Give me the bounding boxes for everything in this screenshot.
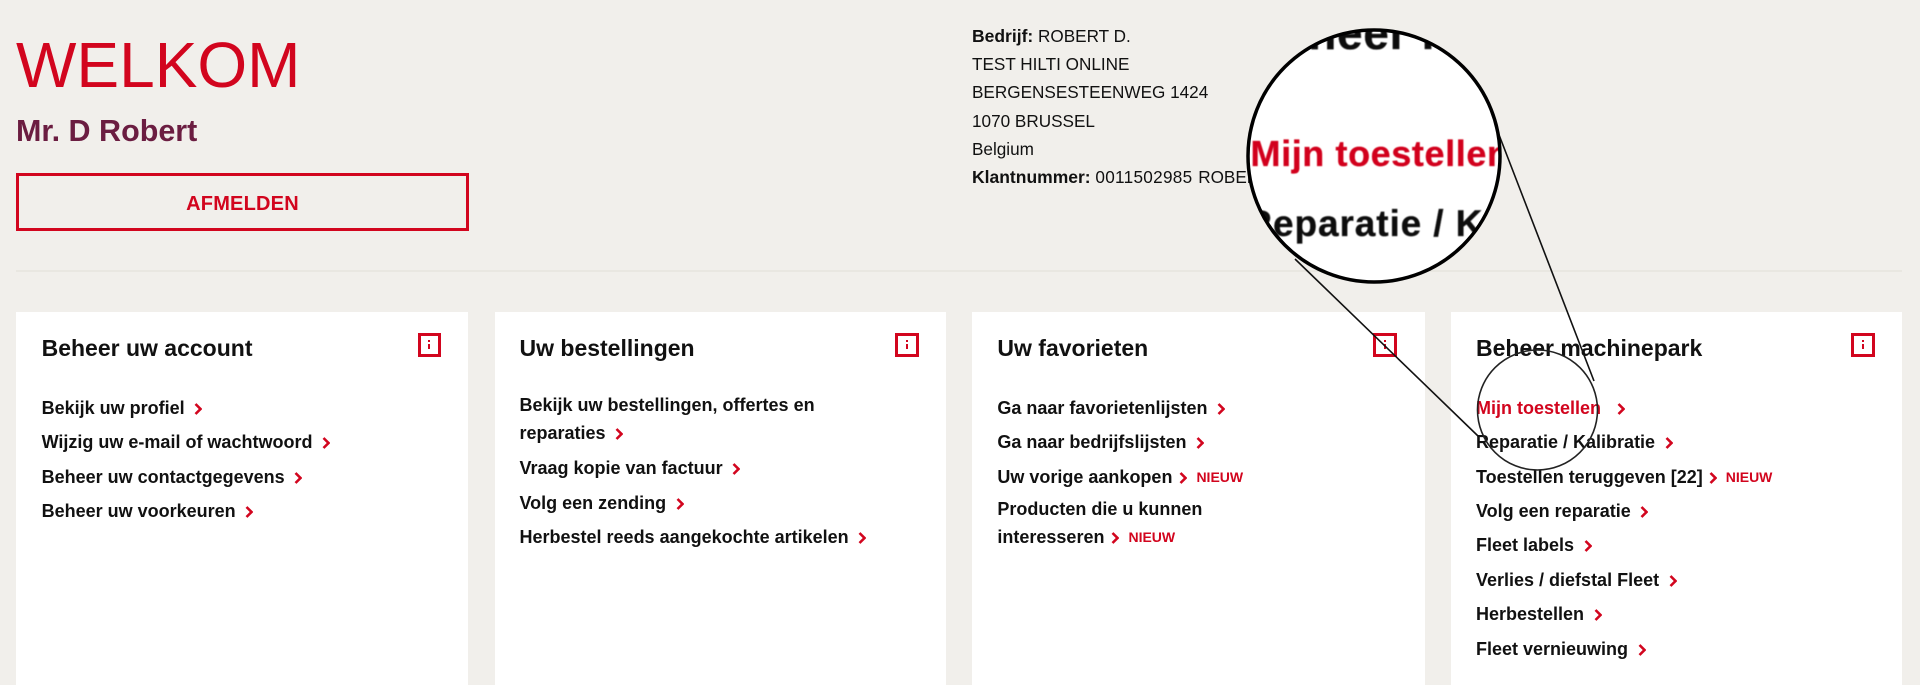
link: bedrijfslijsten: Ga naar bedrijfslijsten — [997, 432, 1186, 452]
company address block: Bedrijf: ROBERT D. — [972, 26, 1131, 46]
link: vorige aankopen: Uw vorige aankopen NIEUW — [997, 467, 1243, 487]
link: herbestel: Herbestel reeds aangekochte artikelen — [520, 527, 849, 547]
link: herbestellen: Herbestellen — [1476, 604, 1584, 624]
link: bestellingen: Bekijk uw bestellingen, offertes en — [520, 395, 815, 415]
heading: Beheer uw account — [42, 335, 252, 361]
link: reparatie: Reparatie / Kalibratie — [1476, 432, 1655, 452]
link: profiel: Bekijk uw profiel — [42, 398, 185, 418]
user name: Mr. D Robert — [16, 114, 197, 148]
heading: Beheer machinepark — [1476, 335, 1702, 361]
link: zending: Volg een zending — [520, 492, 666, 512]
magnified text: Reparatie / Kalibratie — [1245, 203, 1633, 244]
logout button: AFMELDEN — [186, 193, 299, 215]
magnified text: Beheer machinepark — [1248, 7, 1713, 59]
company address block: TEST HILTI ONLINE — [972, 54, 1129, 74]
link: producten: Producten die u kunnen — [997, 498, 1202, 518]
company address block: Belgium — [972, 139, 1034, 159]
links: favorieten — [997, 398, 1244, 546]
icon: info — [1373, 333, 1396, 357]
magnified text: Mijn toestellen — [1250, 133, 1510, 174]
panel: uw bestellingen — [495, 312, 946, 685]
icon: info — [1851, 333, 1874, 357]
icon: info — [895, 333, 918, 357]
link: bestellingen — [520, 395, 815, 443]
link: mijn toestellen: Mijn toestellen — [1476, 398, 1601, 418]
company address block — [972, 26, 1291, 187]
company address block: 1070 BRUSSEL — [972, 111, 1095, 131]
links: machinepark — [1476, 398, 1772, 659]
panel: uw favorieten — [972, 312, 1425, 685]
heading: Uw favorieten — [997, 335, 1148, 361]
panel: beheer uw account — [16, 312, 468, 685]
title: welkom: WELKOM — [16, 29, 300, 101]
links: account — [42, 398, 330, 521]
source circle — [1478, 350, 1598, 470]
panel: beheer machinepark — [1450, 312, 1902, 685]
link: verlies diefstal: Verlies / diefstal Fleet — [1476, 570, 1659, 590]
link: toestellen teruggeven: Toestellen teruggeven [22] NIEUW — [1476, 467, 1772, 487]
logout button — [16, 173, 469, 231]
link: e-mail: Wijzig uw e-mail of wachtwoord — [42, 432, 312, 452]
link: factuur: Vraag kopie van factuur — [520, 458, 723, 478]
links: bestellingen — [520, 395, 866, 547]
link: volg een reparatie: Volg een reparatie — [1476, 501, 1631, 521]
magnifier callout — [1246, 28, 1598, 471]
link: favorietenlijsten: Ga naar favorietenlijsten — [997, 398, 1207, 418]
connector lines — [1295, 127, 1594, 436]
link: fleet vernieuwing: Fleet vernieuwing — [1476, 639, 1628, 659]
company address block: Klantnummer: 0011502985 ROBERT D. — [972, 167, 1291, 187]
link: producten: interesseren NIEUW — [997, 526, 1175, 546]
link: fleet labels: Fleet labels — [1476, 535, 1574, 555]
icon: info — [418, 333, 441, 357]
company address block: BERGENSESTEENWEG 1424 — [972, 82, 1208, 102]
magnified text — [1252, 32, 1498, 244]
heading: Uw bestellingen — [520, 335, 695, 361]
link: contactgegevens: Beheer uw contactgegevens — [42, 467, 285, 487]
link: producten — [997, 498, 1202, 546]
link: voorkeuren: Beheer uw voorkeuren — [42, 501, 236, 521]
magnifier lens — [1246, 28, 1502, 284]
link: bestellingen: reparaties — [520, 423, 606, 443]
